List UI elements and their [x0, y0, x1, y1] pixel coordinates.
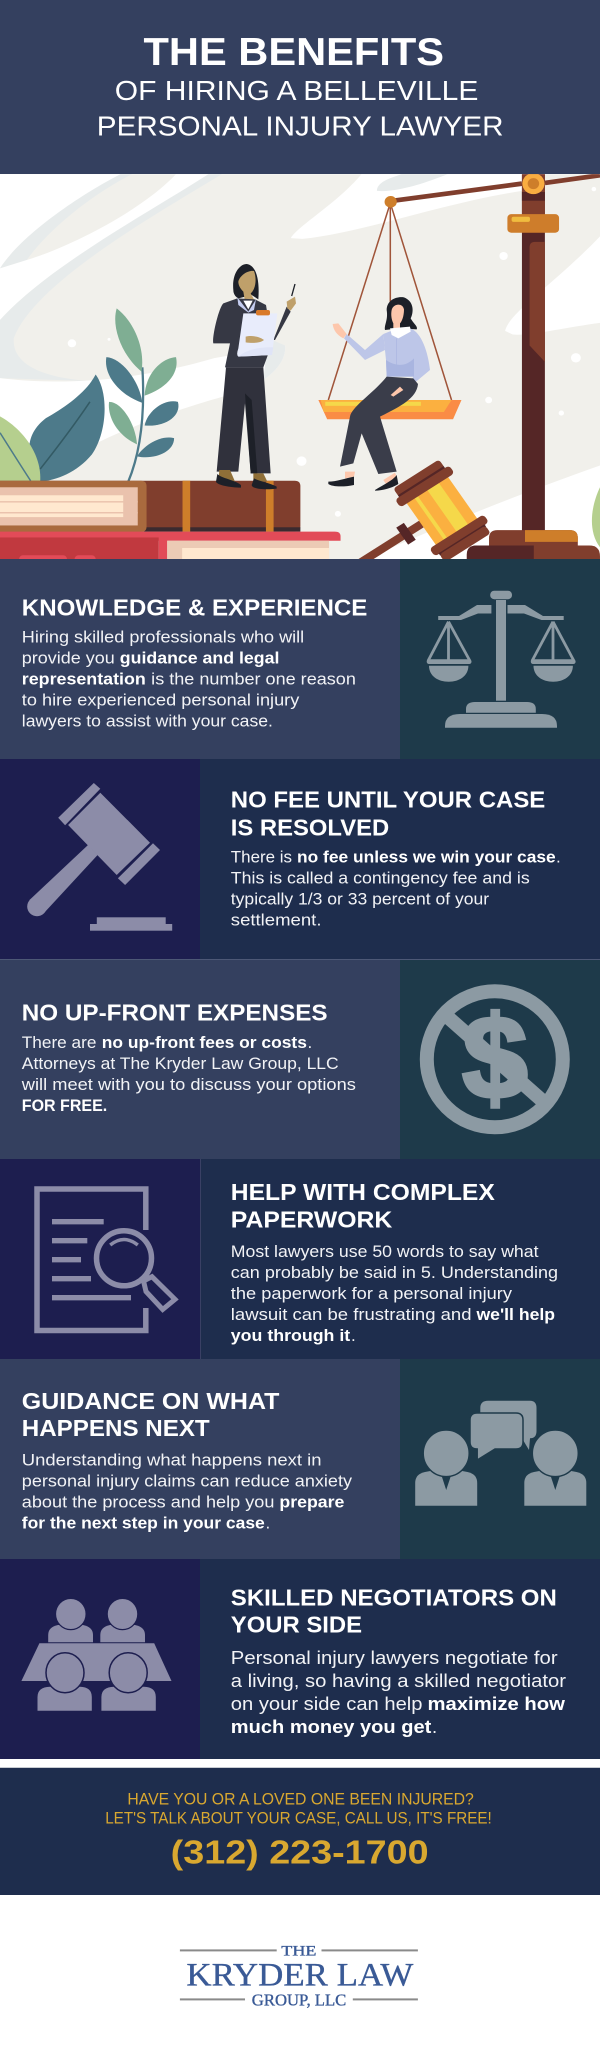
body text: prepare — [279, 1492, 344, 1511]
body text: no up-front fees or costs — [102, 1033, 307, 1052]
body text: will meet with you to discuss your options — [21, 1075, 356, 1094]
body text: is the number one reason — [151, 669, 356, 688]
panel: help with complex paperwork — [0, 1159, 600, 1359]
body text: . — [351, 1326, 356, 1345]
body text: we'll help — [475, 1305, 555, 1324]
icon: no dollar sign — [427, 991, 563, 1127]
body text: personal injury claims can reduce anxiety — [22, 1471, 353, 1490]
body text: settlement. — [231, 910, 322, 929]
body text: representation — [22, 669, 146, 688]
icon: no dollar sign: $ — [462, 992, 528, 1124]
icon: plants — [0, 308, 600, 547]
heading: SKILLED NEGOTIATORS ON — [231, 1585, 557, 1611]
panel: skilled negotiators — [0, 1559, 600, 1759]
phone number: (312) 223-1700 — [171, 1833, 429, 1870]
heading: NO UP-FRONT EXPENSES — [22, 999, 328, 1025]
icon: document with magnifier — [37, 1189, 175, 1330]
subtitle line 2: PERSONAL INJURY LAWYER — [97, 111, 504, 142]
body text — [231, 1647, 566, 1737]
heading: YOUR SIDE — [231, 1612, 362, 1638]
body text: lawsuit can be frustrating and — [231, 1305, 472, 1324]
heading — [231, 1179, 495, 1233]
body text: Most lawyers use 50 words to say what — [231, 1242, 539, 1261]
title banner — [0, 0, 600, 174]
heading: KNOWLEDGE & EXPERIENCE — [22, 595, 367, 621]
icon: gavel — [358, 460, 490, 559]
body text: Hiring skilled professionals who will — [22, 627, 304, 646]
icon: two people talking — [415, 1401, 586, 1506]
body text: lawyers to assist with your case. — [22, 711, 273, 730]
title: THE BENEFITS — [144, 31, 444, 74]
hero illustration — [0, 173, 600, 600]
body text: about the process and help you — [22, 1492, 274, 1511]
icon: negotiation table — [21, 1598, 172, 1711]
body text: maximize how — [428, 1693, 566, 1714]
body text: to hire experienced personal injury — [22, 690, 300, 709]
subtitle line 1: OF HIRING A BELLEVILLE — [115, 75, 478, 106]
body text: a living, so having a skilled negotiator — [231, 1670, 566, 1691]
heading — [231, 787, 545, 841]
body text: much money you get — [231, 1716, 431, 1737]
logo: The Kryder Law Group: GROUP, LLC — [252, 1990, 346, 2009]
icon: scales of justice — [427, 591, 576, 728]
body text — [21, 1033, 356, 1115]
body text: FOR FREE. — [22, 1096, 107, 1115]
body text: no fee unless we win your case — [297, 847, 556, 866]
panel: guidance on what happens next — [0, 1359, 600, 1559]
callout text: HAVE YOU OR A LOVED ONE BEEN INJURED? — [127, 1790, 474, 1808]
body text: . — [266, 1513, 270, 1532]
body text: . — [556, 847, 561, 866]
body text: guidance and legal — [120, 648, 279, 667]
body text: provide you — [22, 648, 115, 667]
body text: on your side can help — [231, 1693, 422, 1714]
heading: HAPPENS NEXT — [22, 1415, 210, 1441]
body text: There are — [22, 1033, 96, 1052]
logo: The Kryder Law Group — [180, 1944, 418, 2009]
heading: GUIDANCE ON WHAT — [22, 1388, 279, 1414]
panel: no fee until resolved — [0, 759, 600, 959]
callout text line 2: LET'S TALK ABOUT YOUR CASE, CALL US, IT'S FREE! — [105, 1809, 492, 1827]
icon: standing lawyer — [213, 264, 296, 489]
heading: IS RESOLVED — [231, 815, 389, 841]
body text: typically 1/3 or 33 percent of your — [231, 889, 489, 908]
heading — [231, 1585, 557, 1638]
body text: . — [432, 1716, 437, 1737]
body text: you through it — [231, 1326, 351, 1345]
body text — [231, 1242, 558, 1345]
body text — [22, 1450, 353, 1532]
body text: Understanding what happens next in — [22, 1450, 322, 1469]
body text: . — [308, 1033, 312, 1052]
logo: The Kryder Law Group: THE — [281, 1944, 316, 1960]
body text: the paperwork for a personal injury — [231, 1284, 513, 1303]
panel: knowledge and experience — [0, 559, 600, 759]
icon: book stack — [0, 481, 341, 563]
heading: HELP WITH COMPLEX — [231, 1179, 495, 1205]
logo: The Kryder Law Group: KRYDER LAW — [186, 1958, 414, 1994]
icon: gavel — [27, 783, 172, 931]
body text: Personal injury lawyers negotiate for — [231, 1647, 558, 1668]
icon: seated client — [328, 297, 430, 491]
body text: Attorneys at The Kryder Law Group, LLC — [22, 1054, 339, 1073]
body text: can probably be said in 5. Understanding — [231, 1263, 558, 1282]
body text — [231, 847, 561, 929]
heading: PAPERWORK — [231, 1207, 393, 1233]
icon: giant scale post and beam — [318, 173, 600, 560]
call to action banner — [0, 1767, 600, 1895]
panel: no up-front expenses — [0, 959, 600, 1159]
body text: There is — [231, 847, 292, 866]
body text: This is called a contingency fee and is — [231, 868, 530, 887]
body text — [22, 627, 356, 730]
heading: NO FEE UNTIL YOUR CASE — [231, 787, 545, 813]
heading — [22, 1388, 279, 1441]
body text: for the next step in your case — [22, 1513, 265, 1532]
